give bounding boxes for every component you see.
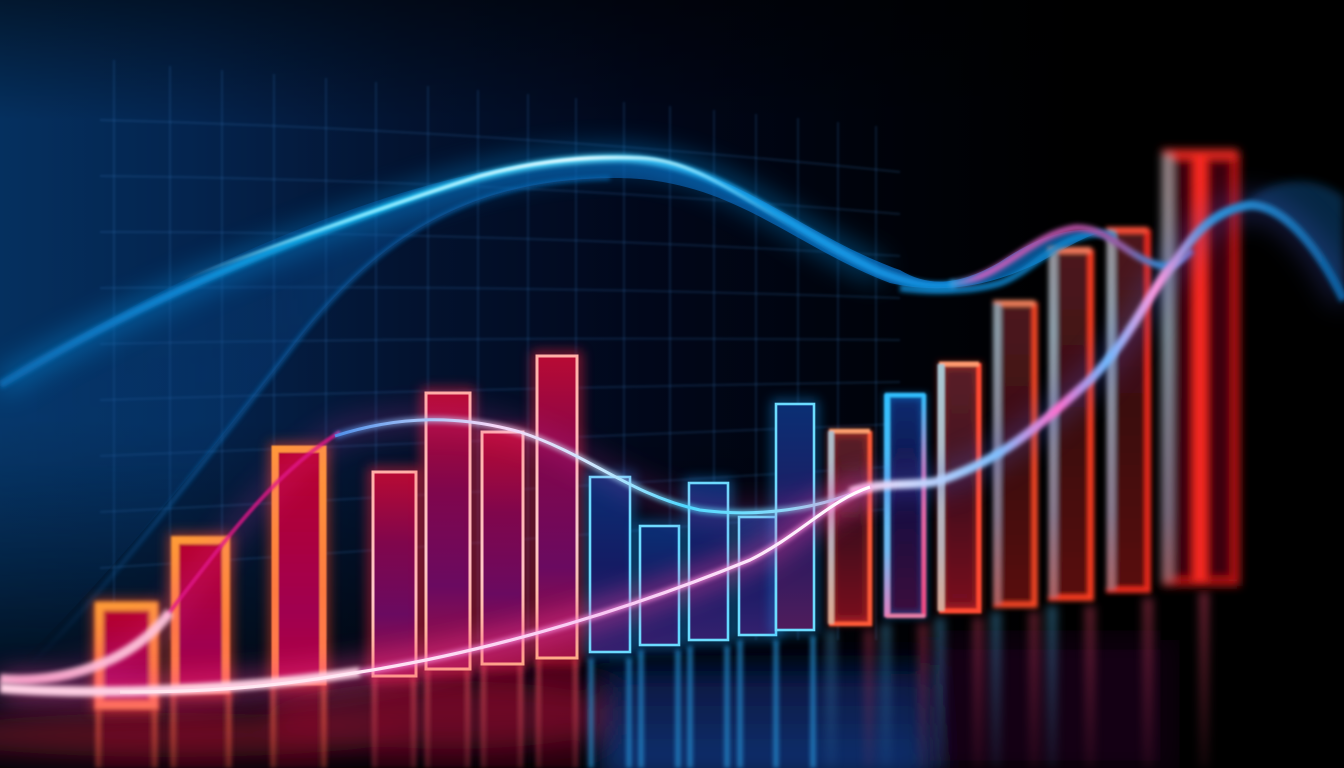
bars: red-magenta group <box>373 356 577 676</box>
red bar reflections <box>98 658 578 768</box>
bar 13 <box>829 431 870 624</box>
bottom bright white-pink curve <box>0 487 870 692</box>
background grid <box>100 60 900 640</box>
bar 4 <box>373 472 416 676</box>
ribbon lower edge <box>30 178 610 665</box>
top blue glowing curve <box>0 158 1192 385</box>
bar 15 <box>939 363 979 611</box>
bars: right transition group <box>829 363 979 624</box>
blue bar reflections <box>591 636 813 768</box>
floor reflections of bars <box>0 592 1204 768</box>
bar 19 <box>1162 153 1238 582</box>
bars: middle blue group <box>590 404 814 652</box>
bar 6 <box>482 432 523 664</box>
bars: far right blurred red group <box>993 153 1238 605</box>
bar 17 <box>1048 249 1091 598</box>
upper arc <box>335 420 860 513</box>
bars: left orange group <box>99 449 323 705</box>
bar 7 <box>537 356 577 658</box>
right side blurred curve <box>850 205 1344 492</box>
bar 10 <box>689 483 728 640</box>
bar 2 <box>175 540 226 690</box>
floor glow: left red and centre blue <box>0 640 1170 768</box>
middle curve over bars <box>0 205 1344 680</box>
bar 18 <box>1106 229 1148 590</box>
ribbon: wide blue band beneath top curve <box>0 157 1110 680</box>
bar 1 <box>99 606 154 705</box>
bar 5 <box>426 393 470 669</box>
bar 11 <box>739 517 776 635</box>
bar 8 <box>590 477 630 652</box>
right bar reflections <box>831 592 1204 768</box>
bar 3 <box>275 449 323 682</box>
bar 14 <box>885 394 925 617</box>
left pale branch <box>0 612 170 680</box>
bar 16 <box>993 302 1035 605</box>
bar 9 <box>640 526 679 645</box>
left magenta branch <box>165 432 340 618</box>
pink strand <box>950 228 1192 284</box>
right tail ribbon <box>1240 181 1344 300</box>
bar 12 <box>776 404 814 630</box>
lower strand <box>900 233 1115 291</box>
